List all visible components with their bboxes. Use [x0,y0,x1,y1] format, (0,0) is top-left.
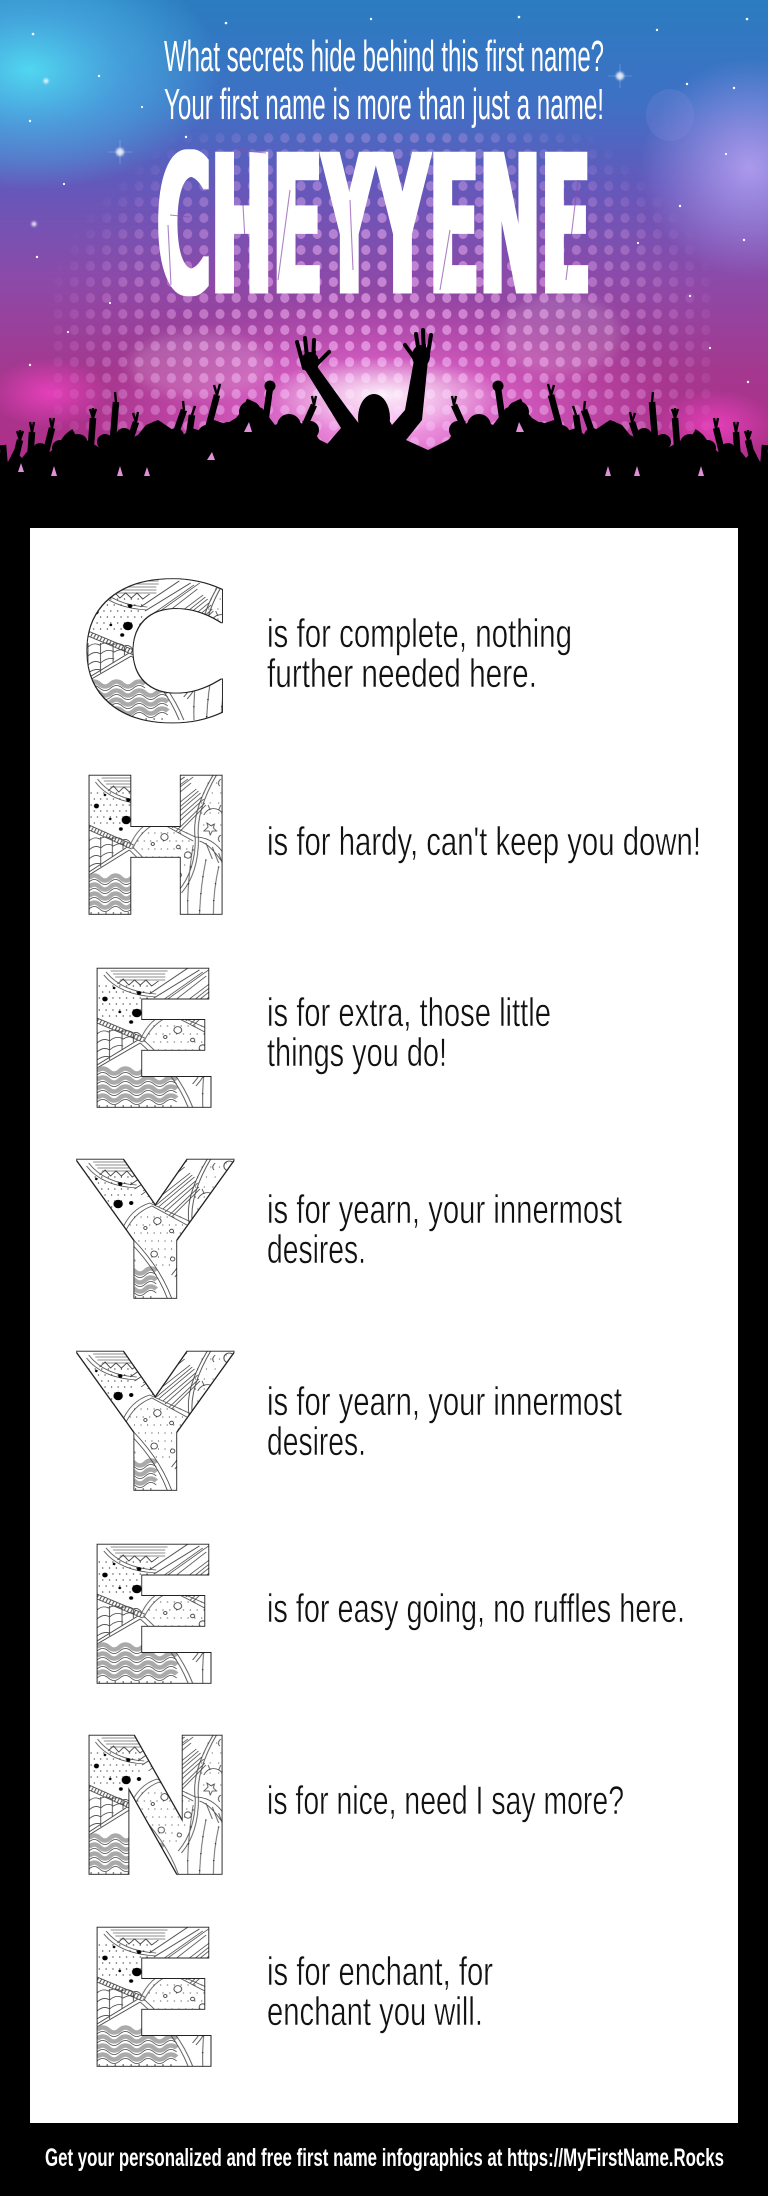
icon: decorated letter E: E [80,1510,224,1725]
icon: decorated letter C: C [79,546,233,762]
row: H [73,740,701,956]
heading: tagline [164,32,604,129]
row: Y [80,1125,622,1340]
text: E meaning: is for extra, those little [267,991,551,1035]
crowd silhouette [0,380,768,540]
panel: letter list [30,528,738,2123]
row: C [79,546,572,762]
text: C meaning: is for complete, nothing [267,612,572,656]
row: E [80,934,551,1149]
text: E meaning: is for enchant, for [267,1950,493,1994]
text: E meaning: things you do! [267,1031,447,1075]
icon: decorated letter Y: Y [80,1317,230,1532]
icon: decorated letter H: H [73,740,238,956]
row: E second [80,1510,685,1725]
row: E third [80,1893,493,2108]
text: Y meaning: is for yearn, your innermost [267,1380,622,1424]
text: Y meaning: is for yearn, your innermost [267,1188,622,1232]
crowd: left half [0,380,384,540]
row: Y second [80,1317,622,1532]
icon: decorated letter Y: Y [80,1125,230,1340]
text: Y meaning: desires. [267,1228,366,1272]
icon: decorated letter E: E [80,934,224,1149]
text: Y meaning: desires. [267,1420,366,1464]
crowd: right half [384,380,768,540]
text: N meaning: is for nice, need I say more? [267,1779,624,1823]
icon: decorated letter E: E [80,1893,224,2108]
header: concert stage background [0,0,768,462]
row: N [73,1700,624,1916]
text: E meaning: enchant you will. [267,1990,483,2034]
icon: decorated letter N: N [73,1700,238,1916]
central figure with raised arms [297,330,431,450]
sparkles [29,16,749,383]
text: C meaning: further needed here. [267,652,537,696]
